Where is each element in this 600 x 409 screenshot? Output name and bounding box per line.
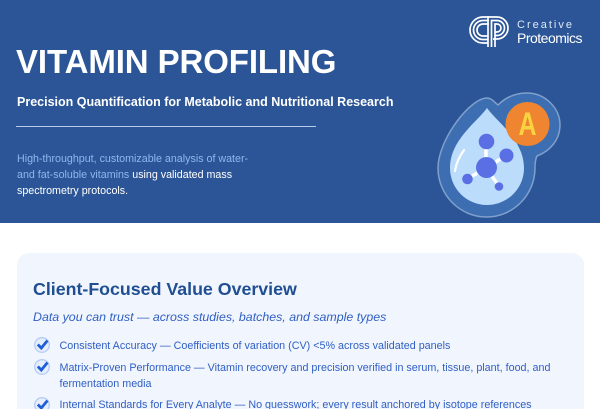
- intro text block: High-throughput, customizable analysis of water-: [17, 153, 248, 165]
- intro text block: spectrometry protocols.: [17, 185, 128, 197]
- check icon 2: [34, 359, 50, 375]
- molecule: [462, 134, 514, 191]
- badge A: A: [518, 107, 537, 143]
- header banner: [0, 0, 600, 223]
- logo: Creative Proteomics: Creative: [517, 18, 574, 30]
- highlight: [455, 150, 464, 171]
- panel heading: Client-Focused Value Overview: [33, 279, 297, 299]
- droplet: [450, 108, 524, 205]
- panel tagline: Data you can trust — across studies, batches, and sample types: [33, 310, 386, 324]
- benefit 2: [60, 362, 550, 390]
- check icon 3: [34, 397, 50, 409]
- benefit 2: fermentation media: [60, 378, 152, 390]
- logo: Creative Proteomics: [469, 16, 582, 47]
- benefit 2: Matrix-Proven Performance — Vitamin recovery and precision verified in serum, tissue, plant, food, and: [60, 362, 550, 374]
- title: VITAMIN PROFILING: [16, 42, 336, 80]
- intro text block: and fat-soluble vitamins using validated mass: [17, 169, 232, 181]
- panel: client-focused value overview: [17, 253, 584, 409]
- benefit 1: Consistent Accuracy — Coefficients of variation (CV) <5% across validated panels: [60, 340, 450, 352]
- icon: vitamin A droplet with molecule: [437, 92, 561, 218]
- halo: [438, 93, 560, 217]
- subtitle: Precision Quantification for Metabolic and Nutritional Research: [17, 95, 393, 109]
- logo: Creative Proteomics: Proteomics: [517, 30, 582, 46]
- intro text block: [17, 153, 248, 197]
- check icon 1: [34, 337, 50, 353]
